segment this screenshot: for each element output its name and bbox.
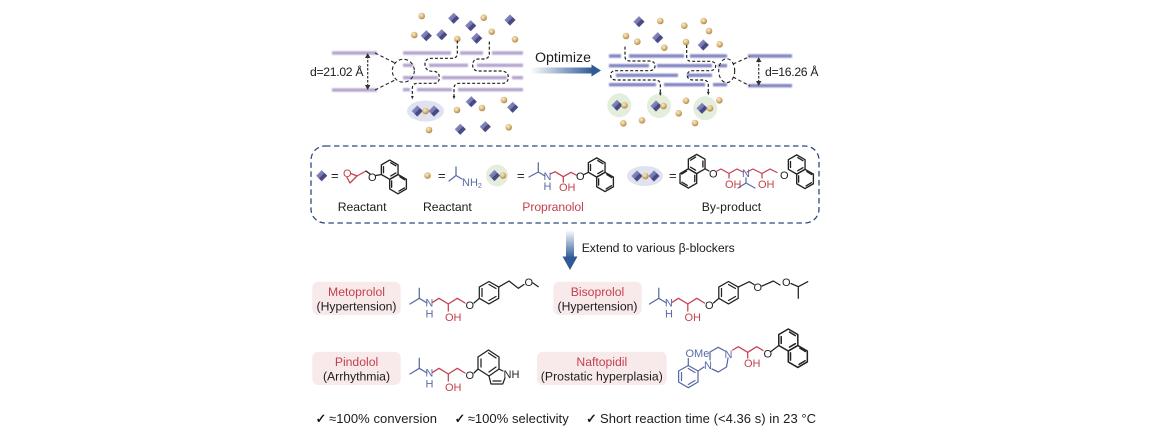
structure: O xyxy=(782,277,791,289)
compound: metoprolol: Metoprolol xyxy=(328,285,385,299)
reactant: epoxide: O xyxy=(343,168,352,180)
structure xyxy=(410,350,519,394)
reactant: isopropylamine: = xyxy=(438,168,446,183)
compound: bisoprolol: (Hypertension) xyxy=(558,300,637,314)
dashed legend frame xyxy=(311,146,819,223)
result: conversion: ✓ xyxy=(316,412,326,427)
product: propranolol: H xyxy=(544,181,552,193)
structure: N xyxy=(704,360,712,372)
product: propranolol: = xyxy=(517,168,525,183)
reactant: isopropylamine: NH xyxy=(462,177,478,189)
structure: OMe xyxy=(686,348,709,360)
by-product xyxy=(627,154,813,214)
result: selectivity: ≈100% selectivity xyxy=(468,411,569,426)
compound: bisoprolol: Bisoprolol xyxy=(571,285,624,299)
name pill xyxy=(312,282,401,315)
arrow: optimize xyxy=(530,50,601,76)
panel: legend of molecules xyxy=(311,146,819,223)
compound: naftopidil xyxy=(537,329,807,388)
compound: naftopidil: Naftopidil xyxy=(576,355,627,369)
compound: pindolol xyxy=(312,350,519,394)
key results: performance checklist xyxy=(316,411,816,427)
reactant: isopropylamine: Reactant xyxy=(423,200,472,214)
by-product: N xyxy=(742,168,750,180)
reactant: epoxide: = xyxy=(331,168,339,183)
structure: O xyxy=(524,277,534,289)
compound: bisoprolol xyxy=(553,277,808,324)
arrow: extend to beta blockers: Extend to various β-blockers xyxy=(582,241,735,255)
spacing label d=16.26: d=16.26 Å xyxy=(765,64,819,79)
by-product: OH xyxy=(725,179,742,191)
structure: NH xyxy=(504,369,519,381)
by-product: By-product xyxy=(702,200,762,214)
structure xyxy=(410,277,538,324)
arrow: optimize: Optimize xyxy=(535,50,591,66)
by-product: O xyxy=(780,170,789,182)
reactant particles xyxy=(411,13,518,135)
reactant: epoxide xyxy=(316,160,406,214)
spacing label d=21.02: d=21.02 Å xyxy=(310,64,364,79)
membrane layers xyxy=(609,56,792,86)
by-product: = xyxy=(669,168,677,183)
name pill xyxy=(312,352,401,385)
result: reaction time: ✓ xyxy=(586,412,597,427)
reactant particles xyxy=(620,16,723,127)
structure: N xyxy=(724,349,732,361)
reactant: isopropylamine: 2 xyxy=(478,183,482,190)
compound: metoprolol xyxy=(312,277,538,324)
pore close-up zoom xyxy=(719,56,761,86)
reactant: epoxide: O xyxy=(368,172,377,184)
arrow: extend to beta blockers xyxy=(562,230,735,270)
structure xyxy=(679,329,807,388)
result: reaction time: Short reaction time (<4.36 s) in 23 °C xyxy=(600,411,816,426)
reactant: isopropylamine xyxy=(423,167,482,214)
compound: naftopidil: (Prostatic hyperplasia) xyxy=(541,370,663,384)
product: propranolol: O xyxy=(576,171,585,183)
structure: OH xyxy=(744,358,761,370)
compound: metoprolol: (Hypertension) xyxy=(317,300,396,314)
product: propranolol: Propranolol xyxy=(522,200,584,214)
structure xyxy=(650,277,808,324)
panel: tight membrane with reduced interlayer spacing xyxy=(607,16,819,127)
membrane layers xyxy=(332,53,523,90)
product: propranolol: N xyxy=(544,171,552,183)
result: conversion: ≈100% conversion xyxy=(329,411,437,426)
dashed diffusion paths xyxy=(611,45,716,96)
product: propranolol xyxy=(486,158,613,214)
result: selectivity: ✓ xyxy=(454,412,465,427)
name pill xyxy=(537,352,667,385)
compound: pindolol: (Arrhythmia) xyxy=(323,370,390,384)
name pill xyxy=(553,282,642,315)
compound: pindolol: Pindolol xyxy=(335,355,378,369)
by-product: O xyxy=(709,168,718,180)
structure: O xyxy=(754,282,762,294)
product particle highlights xyxy=(607,93,717,120)
pore close-up zoom xyxy=(365,53,414,90)
by-product: OH xyxy=(758,179,775,191)
reactant: epoxide: Reactant xyxy=(338,200,387,214)
panel: loose membrane with large interlayer spacing xyxy=(310,13,523,135)
by-product particle highlight xyxy=(407,100,444,122)
product: propranolol: OH xyxy=(559,182,576,194)
structure: O xyxy=(764,348,772,360)
dashed diffusion paths xyxy=(411,41,508,99)
